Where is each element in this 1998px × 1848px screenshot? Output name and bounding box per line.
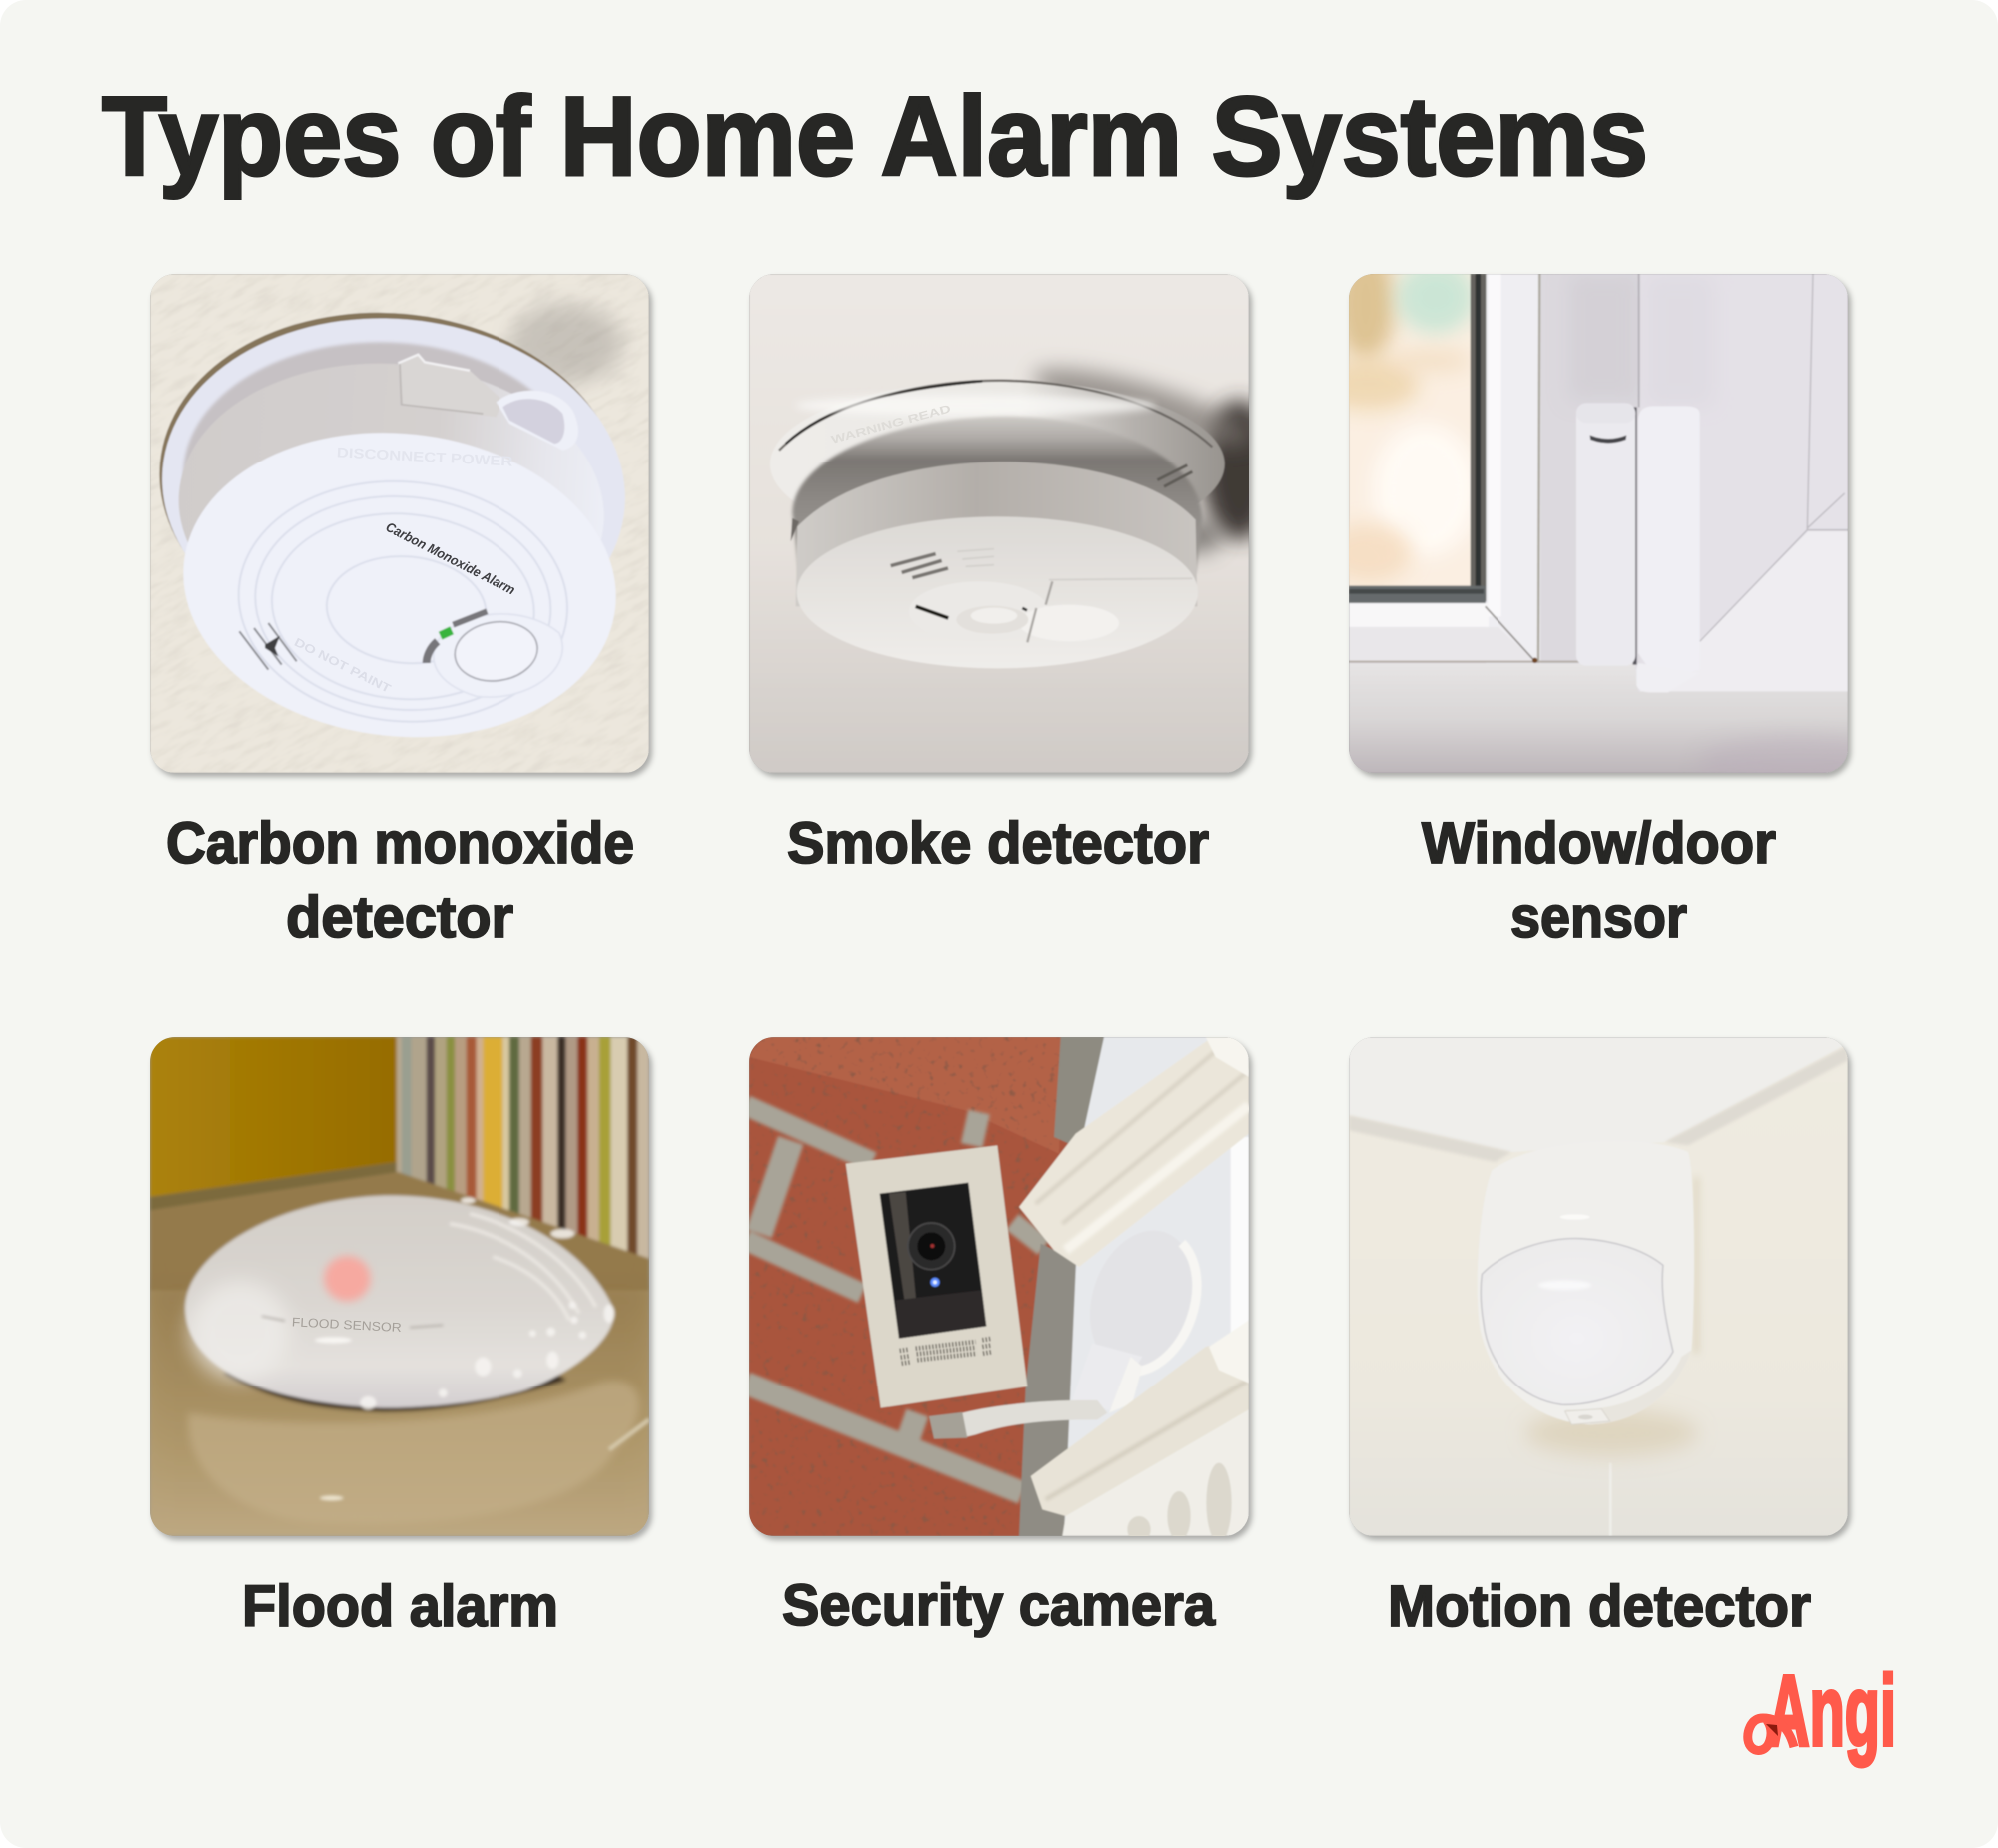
label: carbon monoxide detector: Carbon monoxide (166, 811, 634, 876)
sensor left (1576, 403, 1635, 666)
label: motion detector: Motion detector (1388, 1574, 1811, 1639)
motion device body (1478, 1141, 1694, 1424)
brick mortar joints (746, 1105, 1044, 1493)
ceiling (1349, 1037, 1848, 1152)
sensor dome (185, 1195, 614, 1408)
camera arm (962, 1400, 1107, 1438)
wall mount (1141, 1241, 1201, 1375)
label: carbon monoxide detector (166, 811, 634, 950)
label: smoke detector: Smoke detector (787, 811, 1209, 876)
striped wall (397, 1037, 649, 1264)
panel: smoke detector photo (749, 274, 1276, 773)
label: window/door sensor (1422, 811, 1776, 950)
label: flood alarm: Flood alarm (242, 1574, 558, 1639)
panel: motion detector photo (1349, 1037, 1848, 1536)
panel: carbon monoxide detector photo: DISCONNECT POWER (337, 444, 513, 469)
lens cover (1481, 1239, 1673, 1404)
label: window/door sensor: Window/door (1422, 811, 1776, 876)
carbon monoxide device face rings (238, 480, 568, 723)
label: window/door sensor: sensor (1510, 885, 1687, 950)
sensor printed text: FLOOD SENSOR (292, 1315, 402, 1335)
logo: Angi: Angi (1768, 1655, 1896, 1767)
panel: carbon monoxide detector photo: DO NOT PAINT (292, 635, 394, 696)
speaker dots (900, 1339, 991, 1364)
panel: carbon monoxide detector photo (150, 274, 655, 781)
logo: Angi (1748, 1655, 1896, 1767)
upper moulding (1019, 1037, 1249, 1267)
white column (1064, 1037, 1249, 1536)
title: Types of Home Alarm Systems (102, 74, 1648, 199)
camera body (846, 1145, 1027, 1408)
detector printed text: Carbon Monoxide Alarm (384, 519, 517, 597)
water puddle (188, 1381, 639, 1524)
grey pillar (1054, 1037, 1106, 1144)
label: carbon monoxide detector: detector (286, 885, 513, 950)
lower moulding (1031, 1337, 1249, 1516)
label: security camera: Security camera (782, 1573, 1216, 1638)
window glass blurred view (1319, 247, 1479, 590)
sensor right (1638, 406, 1700, 674)
panel: security camera photo (746, 1037, 1249, 1543)
smoke detector printed text: WARNING READ (830, 403, 952, 447)
yellow wall (150, 1037, 398, 1197)
panel: window/door sensor photo (1349, 274, 1854, 781)
panel: flood alarm photo (150, 1037, 649, 1536)
